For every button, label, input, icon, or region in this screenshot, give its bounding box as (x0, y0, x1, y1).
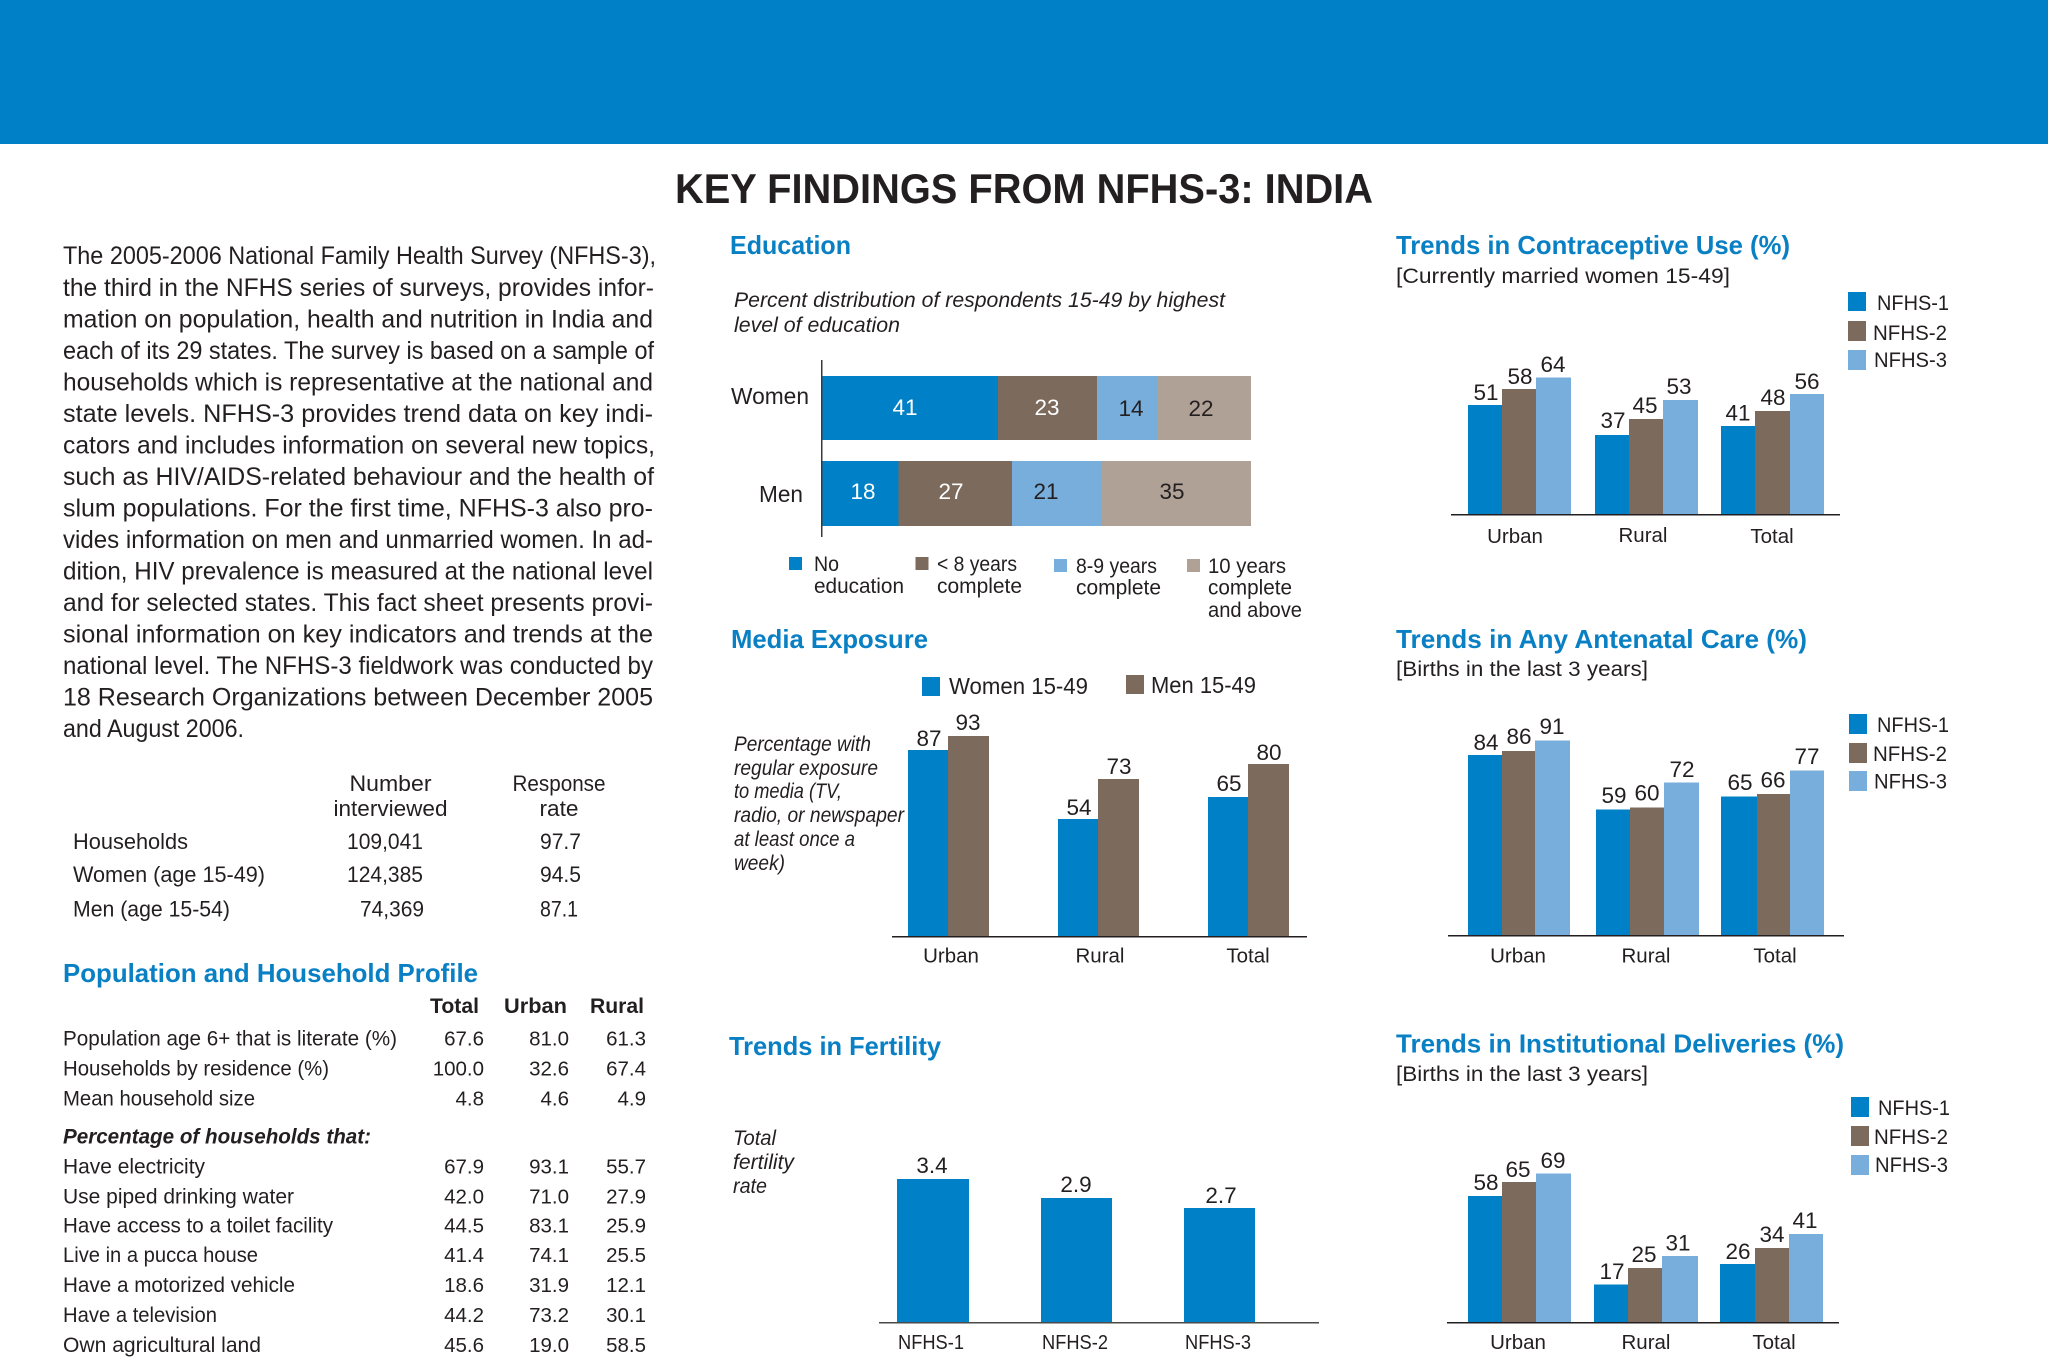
title: KEY FINDINGS FROM NFHS-3: INDIA (675, 165, 1373, 212)
intro paragraph: households which is representative at the national and (63, 368, 653, 396)
panel: contraceptive use (1396, 230, 1949, 548)
sample table (73, 771, 606, 922)
row: piped water: 27.9 (606, 1186, 646, 1208)
row: household size: 4.8 (456, 1088, 484, 1110)
fertility description: fertility (733, 1150, 795, 1174)
row: vehicle: Have a motorized vehicle (63, 1274, 295, 1297)
legend: antenatal care (1849, 714, 1949, 794)
bar chart: fertility (879, 1153, 1319, 1354)
legend: education levels: < 8 years (937, 553, 1017, 576)
bar chart: institutional deliveries: 58 (1473, 1170, 1499, 1195)
intro paragraph: such as HIV/AIDS-related behaviour and the health of (63, 463, 654, 491)
legend: women and men (922, 672, 1256, 699)
legend: education levels: complete (1076, 576, 1161, 600)
media description (734, 732, 905, 875)
bar chart: media (892, 710, 1307, 968)
intro paragraph: the third in the NFHS series of surveys, provides infor- (63, 274, 654, 302)
row: literate (63, 1028, 646, 1050)
row: residence: Households by residence (%) (63, 1058, 329, 1080)
row: piped water: 71.0 (529, 1186, 569, 1208)
stacked bar: women: 22 (1188, 396, 1214, 421)
bar chart: contraceptive use: 64 (1540, 352, 1566, 377)
row: toilet: 83.1 (529, 1214, 569, 1238)
row: residence: 67.4 (606, 1058, 646, 1080)
bar chart: contraceptive use: Rural (1618, 524, 1668, 547)
legend: education levels: 10 years (1208, 555, 1286, 578)
subheading: contraceptive use: [Currently married women 15-49] (1396, 265, 1730, 288)
bar chart: contraceptive use: 48 (1760, 385, 1786, 410)
bar chart: institutional deliveries: Total (1752, 1331, 1796, 1354)
bar chart: contraceptive use: 41 (1725, 400, 1751, 426)
row: residence: 32.6 (529, 1058, 569, 1080)
row: electricity: 67.9 (444, 1156, 484, 1178)
bar chart: institutional deliveries: 25 (1631, 1242, 1657, 1267)
bar chart: antenatal care: Urban (1490, 944, 1546, 968)
fertility description: Total (733, 1126, 777, 1150)
row: television (63, 1304, 646, 1327)
bar chart: media: Urban (923, 944, 979, 968)
row: residence (63, 1058, 646, 1080)
heading: media exposure: Media Exposure (731, 624, 928, 654)
bar chart: contraceptive use: 53 (1666, 374, 1692, 399)
profile column headers (430, 995, 644, 1018)
row: television: 30.1 (606, 1304, 646, 1327)
legend: contraceptive use: NFHS-2 (1873, 322, 1947, 345)
row: vehicle (63, 1274, 646, 1297)
row: literate: Population age 6+ that is literate (%) (63, 1028, 397, 1050)
bar chart: institutional deliveries: Urban (1490, 1331, 1546, 1354)
column header: response rate (512, 771, 606, 821)
legend: antenatal care: NFHS-2 (1873, 743, 1947, 766)
heading: population and household profile: Population and Household Profile (63, 958, 478, 988)
media description: to media (TV, (734, 779, 842, 803)
bar chart: fertility: 3.4 (916, 1153, 948, 1178)
bar chart: fertility: NFHS-2 (1042, 1331, 1108, 1354)
profile table (63, 995, 646, 1357)
row: pucca house: 25.5 (606, 1244, 646, 1267)
education description: level of education (734, 313, 900, 337)
row: toilet: 25.9 (606, 1214, 646, 1238)
bar chart: institutional deliveries: 31 (1665, 1230, 1691, 1256)
stacked bar: women: 14 (1118, 396, 1144, 421)
bar chart: contraceptive use: 45 (1632, 393, 1658, 418)
profile column headers: Total (430, 995, 479, 1018)
media description: regular exposure (734, 756, 878, 780)
row: women: 94.5 (540, 862, 581, 887)
row: agricultural land (63, 1334, 646, 1357)
row: vehicle: 18.6 (444, 1274, 484, 1297)
bar chart: antenatal care: Total (1753, 944, 1797, 968)
bar chart: antenatal care: 72 (1669, 757, 1695, 782)
row: television: Have a television (63, 1304, 217, 1327)
bar chart: fertility: NFHS-3 (1185, 1331, 1251, 1354)
row: literate: 81.0 (529, 1028, 569, 1050)
bar chart: contraceptive use: 51 (1473, 380, 1499, 405)
row: television: 73.2 (529, 1304, 569, 1327)
media description: at least once a (734, 827, 855, 851)
row: electricity: 55.7 (606, 1156, 646, 1178)
stacked bar: men: 21 (1033, 479, 1059, 504)
row: piped water: 42.0 (444, 1186, 484, 1208)
bar chart: contraceptive use: Total (1750, 525, 1794, 548)
legend: institutional deliveries: NFHS-1 (1878, 1097, 1950, 1120)
legend: education levels: education (814, 575, 904, 598)
profile column headers: Rural (590, 995, 644, 1018)
intro paragraph (63, 242, 656, 743)
media description: radio, or newspaper (734, 803, 905, 827)
row: electricity: 93.1 (529, 1156, 569, 1178)
row: agricultural land: 58.5 (606, 1334, 646, 1357)
row: electricity (63, 1156, 646, 1178)
stacked bar: women: 41 (892, 395, 918, 420)
bar chart: institutional deliveries: 65 (1505, 1157, 1531, 1182)
legend: institutional deliveries: NFHS-3 (1875, 1154, 1948, 1177)
row: piped water (63, 1186, 646, 1208)
row: agricultural land: 19.0 (529, 1334, 569, 1357)
intro paragraph: 18 Research Organizations between December 2005 (63, 684, 653, 712)
bar chart: fertility: 2.7 (1205, 1183, 1237, 1208)
row: television: 44.2 (444, 1304, 484, 1327)
row: vehicle: 12.1 (606, 1274, 646, 1297)
heading: trends in fertility: Trends in Fertility (729, 1031, 942, 1061)
media description: week) (734, 851, 785, 875)
row: men: 74,369 (360, 896, 424, 922)
row: toilet (63, 1214, 646, 1238)
row: household size (63, 1088, 646, 1110)
subheading: percentage of households: Percentage of households that: (63, 1126, 371, 1148)
row: women (73, 862, 581, 887)
panel: institutional deliveries (1396, 1028, 1950, 1354)
row: vehicle: 31.9 (529, 1274, 569, 1297)
row labels (731, 383, 809, 507)
row: pucca house: Live in a pucca house (63, 1244, 258, 1267)
bar chart: antenatal care: Rural (1622, 944, 1670, 968)
heading: contraceptive use: Trends in Contraceptive Use (%) (1396, 230, 1790, 260)
row: households: 97.7 (540, 829, 581, 854)
row: households (73, 829, 581, 854)
intro paragraph: vides information on men and unmarried women. In ad- (63, 526, 653, 554)
bar chart: institutional deliveries: 34 (1759, 1222, 1785, 1247)
subheading: institutional deliveries: [Births in the last 3 years] (1396, 1063, 1648, 1086)
bar chart: media: 93 (955, 710, 981, 735)
row: agricultural land: Own agricultural land (63, 1334, 261, 1357)
column header: response rate: rate (540, 796, 578, 821)
row: women: 124,385 (347, 862, 423, 887)
row labels: Women (731, 383, 809, 409)
row: pucca house: 41.4 (444, 1244, 484, 1267)
legend: education levels: and above (1208, 599, 1302, 622)
intro paragraph: dition, HIV prevalence is measured at the national level (63, 558, 653, 586)
legend: contraceptive use (1848, 292, 1949, 372)
bar chart: antenatal care: 77 (1794, 744, 1820, 769)
intro paragraph: The 2005-2006 National Family Health Survey (NFHS-3), (63, 242, 656, 270)
bar chart: institutional deliveries: 26 (1725, 1239, 1751, 1264)
header band (0, 0, 2048, 144)
bar chart: institutional deliveries (1447, 1148, 1839, 1354)
stacked bar: women: 23 (1034, 395, 1060, 420)
intro paragraph: cators and includes information on several new topics, (63, 432, 655, 460)
bar chart: contraceptive use: Urban (1487, 525, 1543, 548)
row: household size: 4.9 (618, 1088, 646, 1110)
bar chart: antenatal care: 91 (1539, 714, 1565, 739)
bar chart: fertility: NFHS-1 (898, 1331, 964, 1354)
row labels: Men (759, 481, 803, 507)
row: household size: 4.6 (540, 1088, 569, 1110)
row: literate: 61.3 (606, 1028, 646, 1050)
row: men: Men (age 15-54) (73, 896, 230, 922)
bar chart: institutional deliveries: 41 (1792, 1208, 1818, 1233)
row: women: Women (age 15-49) (73, 862, 265, 887)
education description (734, 288, 1226, 337)
heading: education: Education (730, 230, 851, 260)
row: agricultural land: 45.6 (444, 1334, 484, 1357)
heading: antenatal care: Trends in Any Antenatal Care (%) (1396, 624, 1807, 654)
row: residence: 100.0 (433, 1058, 484, 1080)
bar chart: media: 87 (916, 726, 942, 751)
bar chart: institutional deliveries: 17 (1599, 1259, 1625, 1284)
bar chart: media: 54 (1066, 795, 1092, 820)
column header: number interviewed: interviewed (334, 796, 448, 821)
education description: Percent distribution of respondents 15-49 by highest (734, 288, 1226, 312)
legend: contraceptive use: NFHS-3 (1874, 349, 1947, 372)
panel: media exposure (731, 624, 1307, 968)
legend: institutional deliveries: NFHS-2 (1874, 1126, 1948, 1149)
row: men (73, 896, 578, 922)
row: men: 87.1 (540, 896, 578, 922)
row: households: 109,041 (347, 829, 423, 854)
row: literate: 67.6 (444, 1028, 484, 1050)
row: household size: Mean household size (63, 1088, 255, 1110)
profile column headers: Urban (504, 995, 567, 1018)
intro paragraph: mation on population, health and nutrition in India and (63, 306, 653, 334)
row: piped water: Use piped drinking water (63, 1186, 294, 1208)
bar chart: contraceptive use: 56 (1794, 369, 1820, 394)
bar chart: antenatal care: 65 (1727, 770, 1753, 795)
bar chart: antenatal care: 84 (1473, 730, 1499, 755)
bar chart: institutional deliveries: Rural (1622, 1331, 1670, 1354)
heading: institutional deliveries: Trends in Institutional Deliveries (%) (1396, 1028, 1844, 1058)
media description: Percentage with (734, 732, 871, 756)
legend: education levels: complete (937, 575, 1022, 598)
row: pucca house: 74.1 (529, 1244, 569, 1267)
legend: antenatal care: NFHS-3 (1874, 770, 1947, 794)
bar chart: antenatal care: 66 (1760, 768, 1786, 792)
panel: fertility (729, 1031, 1319, 1354)
vertical axis (821, 360, 822, 537)
intro paragraph: sional information on key indicators and trends at the (63, 620, 653, 648)
column header: number interviewed: Number (350, 771, 432, 796)
bar chart: antenatal care: 86 (1506, 724, 1532, 749)
bar chart: media: Rural (1076, 944, 1124, 968)
legend: education levels: No (814, 553, 839, 576)
legend: institutional deliveries (1851, 1097, 1950, 1177)
legend: women and men: Women 15-49 (949, 673, 1088, 699)
bar chart: media: 73 (1106, 754, 1132, 779)
fertility description (733, 1126, 795, 1198)
bar chart: antenatal care: 59 (1601, 783, 1627, 808)
legend: antenatal care: NFHS-1 (1877, 714, 1949, 737)
subheading: antenatal care: [Births in the last 3 years] (1396, 658, 1648, 681)
bar chart: contraceptive use (1451, 352, 1840, 548)
panel: education (730, 230, 1302, 622)
legend: education levels: 8-9 years (1076, 555, 1157, 578)
legend: education levels (789, 553, 1302, 622)
intro paragraph: and August 2006. (63, 715, 244, 743)
intro paragraph: slum populations. For the first time, NFHS-3 also pro- (63, 494, 653, 522)
legend: contraceptive use: NFHS-1 (1877, 292, 1949, 315)
row: pucca house (63, 1244, 646, 1267)
legend: women and men: Men 15-49 (1151, 672, 1256, 698)
intro paragraph: each of its 29 states. The survey is based on a sample of (63, 337, 654, 365)
intro paragraph: national level. The NFHS-3 fieldwork was conducted by (63, 652, 653, 680)
stacked bar: women (822, 376, 1251, 440)
bar chart: antenatal care (1448, 714, 1844, 968)
row: toilet: 44.5 (444, 1214, 484, 1238)
bar chart: media: 80 (1256, 740, 1282, 765)
bar chart: media: 65 (1216, 771, 1242, 796)
row: households: Households (73, 829, 188, 854)
bar chart: contraceptive use: 37 (1600, 408, 1626, 433)
intro paragraph: and for selected states. This fact sheet presents provi- (63, 589, 653, 617)
stacked bar: men: 18 (850, 479, 876, 504)
bar chart: institutional deliveries: 69 (1540, 1148, 1566, 1173)
row: toilet: Have access to a toilet facility (63, 1214, 333, 1238)
bar chart: antenatal care: 60 (1634, 781, 1660, 806)
bar chart: contraceptive use: 58 (1507, 364, 1533, 389)
bar chart: fertility: 2.9 (1060, 1172, 1092, 1197)
fertility description: rate (733, 1174, 767, 1198)
panel: antenatal care (1396, 624, 1949, 968)
stacked bar: men: 27 (938, 479, 964, 504)
row: electricity: Have electricity (63, 1156, 205, 1178)
stacked bar: men: 35 (1159, 479, 1185, 504)
legend: education levels: complete (1208, 576, 1292, 600)
intro paragraph: state levels. NFHS-3 provides trend data on key indi- (63, 400, 653, 428)
bar chart: media: Total (1226, 944, 1270, 968)
column header: number interviewed (334, 771, 448, 821)
stacked bar: men (822, 461, 1251, 526)
column header: response rate: Response (512, 771, 606, 796)
